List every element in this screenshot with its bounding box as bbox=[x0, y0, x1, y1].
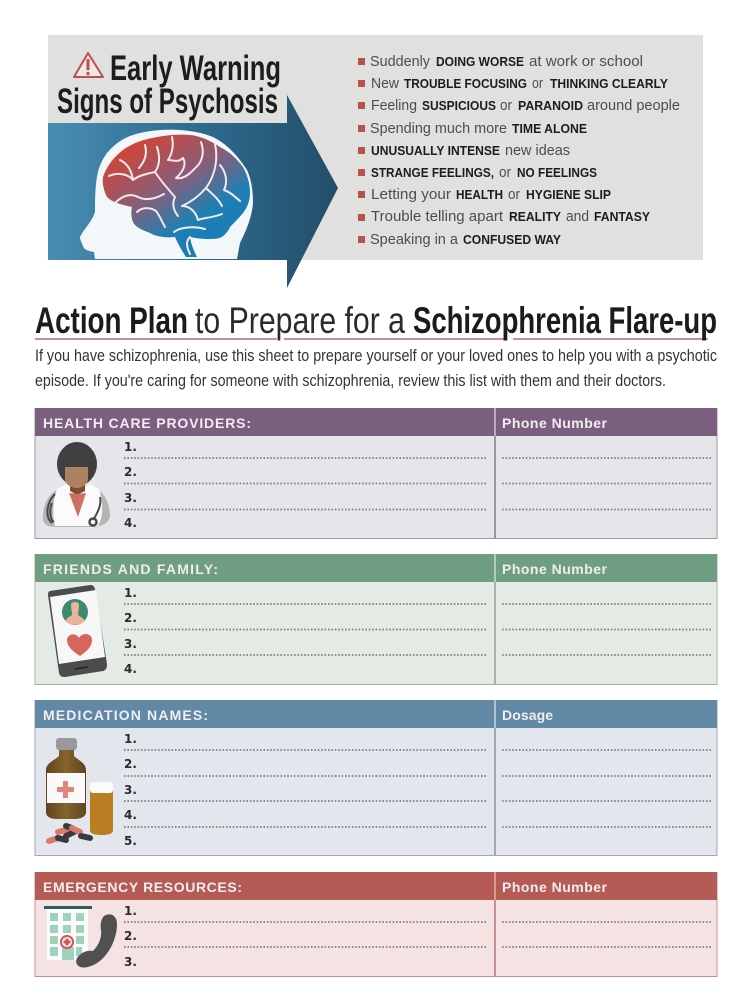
numbered lines: 4. bbox=[124, 662, 137, 676]
heading: HEALTH CARE PROVIDERS: bbox=[43, 415, 251, 431]
numbered lines: 5. bbox=[124, 834, 137, 848]
column heading: Phone Number bbox=[502, 415, 608, 431]
title: early warning signs of psychosis: Early Warning bbox=[110, 49, 281, 88]
warning signs list: Trouble telling apart bbox=[371, 208, 504, 225]
warning signs list: around people bbox=[587, 97, 680, 114]
warning signs list: Speaking in a bbox=[370, 231, 459, 248]
numbered lines: 1. bbox=[124, 586, 137, 600]
panel: early warning signs bbox=[48, 35, 703, 288]
numbered lines: 1. bbox=[124, 440, 137, 454]
numbered lines: 3. bbox=[124, 955, 137, 969]
warning signs list: HYGIENE SLIP bbox=[526, 188, 611, 202]
numbered lines: 4. bbox=[124, 516, 137, 530]
column heading: Dosage bbox=[502, 707, 553, 723]
warning signs list: or bbox=[499, 164, 511, 181]
column heading: Phone Number bbox=[502, 561, 608, 577]
panel: friends and family bbox=[35, 554, 717, 684]
numbered lines: 2. bbox=[124, 611, 137, 625]
numbered lines: 3. bbox=[124, 783, 137, 797]
panel: emergency resources bbox=[35, 872, 717, 976]
numbered lines: 1. bbox=[124, 904, 137, 918]
numbered lines bbox=[124, 732, 711, 848]
warning signs list: Spending much more bbox=[370, 120, 507, 137]
warning signs list: FANTASY bbox=[594, 210, 651, 224]
icon: medicine bottles and pills bbox=[46, 738, 113, 841]
warning signs list: STRANGE FEELINGS, bbox=[371, 166, 494, 180]
arrow bbox=[48, 95, 338, 288]
warning signs list: Feeling bbox=[371, 97, 417, 114]
heading: action plan: to Prepare for a bbox=[195, 300, 405, 341]
panel: medication names bbox=[35, 700, 717, 856]
icon: smartphone bbox=[48, 585, 107, 677]
warning signs list: or bbox=[500, 97, 512, 114]
heading: MEDICATION NAMES: bbox=[43, 707, 208, 723]
numbered lines: 2. bbox=[124, 757, 137, 771]
warning signs list: TROUBLE FOCUSING bbox=[404, 77, 527, 91]
warning signs list: at work or school bbox=[529, 53, 643, 70]
warning signs list: or bbox=[508, 186, 520, 203]
icon: warning triangle bbox=[74, 53, 103, 77]
warning signs list: PARANOID bbox=[518, 99, 583, 113]
warning signs list: new ideas bbox=[505, 142, 570, 159]
warning signs list: UNUSUALLY INTENSE bbox=[371, 144, 500, 158]
warning signs list: CONFUSED WAY bbox=[463, 233, 562, 247]
numbered lines bbox=[124, 904, 711, 969]
warning signs list: and bbox=[566, 208, 589, 225]
icon: doctor bbox=[43, 442, 110, 527]
warning signs list bbox=[358, 53, 680, 248]
intro text bbox=[35, 346, 717, 390]
warning signs list: NO FEELINGS bbox=[517, 166, 597, 180]
panel: health care providers bbox=[35, 408, 717, 538]
warning signs list: THINKING CLEARLY bbox=[550, 77, 669, 91]
warning signs list: or bbox=[532, 75, 543, 92]
heading: action plan bbox=[35, 300, 717, 341]
heading: FRIENDS AND FAMILY: bbox=[43, 561, 218, 577]
warning signs list: SUSPICIOUS bbox=[422, 99, 496, 113]
title: early warning signs of psychosis: Signs of Psychosis bbox=[57, 82, 278, 121]
numbered lines bbox=[124, 440, 711, 530]
warning signs list: Letting your bbox=[371, 186, 451, 203]
numbered lines: 2. bbox=[124, 465, 137, 479]
numbered lines: 4. bbox=[124, 808, 137, 822]
column heading: Phone Number bbox=[502, 879, 608, 895]
warning signs list: TIME ALONE bbox=[512, 122, 587, 136]
heading: EMERGENCY RESOURCES: bbox=[43, 879, 242, 895]
numbered lines: 1. bbox=[124, 732, 137, 746]
numbered lines: 3. bbox=[124, 491, 137, 505]
numbered lines: 3. bbox=[124, 637, 137, 651]
warning signs list: Suddenly bbox=[370, 53, 430, 70]
warning signs list: New bbox=[371, 75, 399, 92]
numbered lines bbox=[124, 586, 711, 676]
warning signs list: DOING WORSE bbox=[436, 55, 524, 69]
numbered lines: 2. bbox=[124, 929, 137, 943]
title: early warning signs of psychosis bbox=[57, 49, 281, 121]
warning signs list: REALITY bbox=[509, 210, 562, 224]
warning signs list: HEALTH bbox=[456, 188, 503, 202]
icon: hospital and telephone bbox=[44, 906, 117, 968]
icon: head with brain bbox=[80, 130, 253, 259]
heading: action plan: Action Plan bbox=[35, 300, 188, 341]
